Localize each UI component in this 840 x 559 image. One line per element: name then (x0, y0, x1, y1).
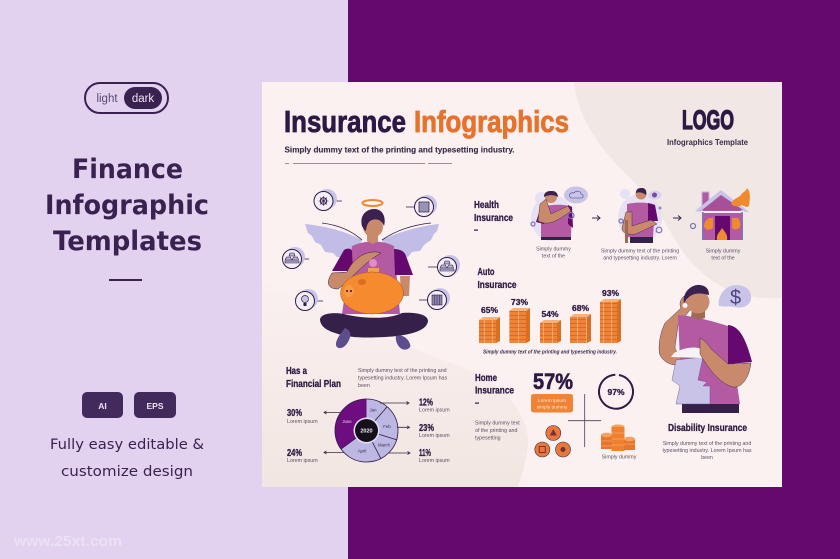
pie stat 23% (419, 423, 450, 439)
financial plan description: typesetting industry. Lorem Ipsum has (358, 376, 447, 382)
cross divider (568, 394, 601, 447)
watermark: www.25xt.com (13, 534, 122, 550)
left arm raised to head (659, 296, 690, 365)
health step 2 text: and typesetting industry. Lorem (603, 256, 677, 262)
pie stat 30% (287, 408, 318, 425)
pie stat 11% (419, 448, 450, 464)
orange callout: Lorem Ipsum (538, 398, 566, 404)
left panel heading (45, 154, 209, 257)
infographic card (262, 82, 782, 487)
health step 1 text: text of the (542, 254, 565, 260)
section: home insurance: of the printing and (475, 428, 517, 434)
pie stat 12%: 12% (419, 398, 433, 408)
sleeve (728, 325, 752, 364)
section: health insurance heading (474, 199, 513, 231)
section: financial plan heading: Financial Plan (286, 378, 341, 390)
shirt (342, 242, 400, 314)
bar 68% (570, 303, 591, 343)
icon: gear (314, 189, 337, 210)
health step 2 text: Simply dummy text of the printing (601, 248, 679, 254)
icon: safe (414, 195, 437, 216)
pie arrows (324, 402, 410, 454)
subtitle: Simply dummy text of the printing and typesetting industry. (284, 144, 514, 154)
financial plan description: Simply dummy text of the printing and (358, 368, 447, 374)
pie stat 24%: Lorem ipsum (287, 458, 318, 464)
section: financial plan heading (286, 365, 341, 390)
card background blob top right (574, 82, 782, 298)
section: disability insurance: been (701, 455, 713, 461)
pie chart: June (342, 419, 352, 424)
bar 93% (600, 288, 621, 343)
falling coin (369, 259, 377, 267)
slice: June (335, 399, 366, 449)
icon: calculator (428, 288, 450, 310)
piggy bank (340, 272, 404, 314)
section: disability insurance: Simply dummy text of the printing and (663, 441, 751, 447)
section: financial plan heading: Has a (286, 365, 307, 377)
pie stat 23%: 23% (419, 423, 434, 434)
shirt (678, 315, 740, 404)
financial plan description (358, 368, 447, 389)
title: Insurance (284, 104, 406, 139)
stat 57%: 57% (533, 369, 573, 394)
left panel heading: Infographic (45, 190, 209, 221)
neck and head (367, 228, 378, 244)
house text: Simply dummy (706, 248, 741, 254)
pie chart: March (378, 442, 391, 448)
icon: light bulb (296, 289, 318, 310)
ring stat 97%: 97% (607, 387, 625, 397)
section: health insurance heading: Insurance (474, 212, 513, 224)
health step 1 text: Simply dummy (536, 246, 571, 252)
left foot (336, 328, 350, 348)
right foot (396, 335, 410, 350)
icon: gold bars right (438, 255, 460, 276)
file format badges: EPS (146, 401, 164, 411)
section: disability insurance (662, 422, 752, 461)
left wing (305, 224, 362, 257)
pie stat 30%: Lorem ipsum (287, 419, 318, 425)
section: disability insurance: Disability Insurance (668, 422, 747, 434)
ring stat 97% (596, 372, 636, 411)
file format badges (82, 392, 176, 418)
pie chart: Jan (370, 408, 377, 412)
orange callout (531, 394, 573, 412)
logo: Infographics Template (667, 138, 749, 147)
crossed legs (320, 313, 428, 338)
left panel heading: Finance (72, 154, 183, 185)
pie center 2020: 2020 (360, 428, 373, 434)
bar 54%: 54% (541, 309, 559, 319)
right wing (382, 224, 439, 257)
section: disability insurance: typesetting industry. Lorem Ipsum has (662, 448, 752, 454)
section: home insurance: Insurance (475, 384, 514, 396)
sleeves (332, 249, 413, 275)
mode toggle: light (96, 93, 118, 105)
pie chart: Feb (383, 424, 391, 429)
bar 54% (540, 309, 561, 343)
mode toggle: dark (132, 93, 154, 105)
logo: LOGO (682, 105, 734, 135)
section: health insurance heading: Health (474, 199, 499, 211)
mode toggle (85, 83, 168, 113)
card background blob bottom left (262, 280, 528, 487)
section: home insurance: Simply dummy text (475, 420, 520, 426)
section: auto insurance heading: Auto (478, 266, 494, 278)
arrow step 1 to 2 (592, 216, 600, 220)
pie stat 11%: Lorem ipsum (419, 458, 450, 464)
section: auto insurance heading (478, 266, 517, 291)
health step 2 figure (618, 188, 662, 243)
bar 65%: 65% (481, 305, 498, 315)
large figure reading bill (659, 285, 752, 413)
section: auto insurance heading: Insurance (478, 279, 517, 291)
pie stat 23%: Lorem ipsum (419, 433, 450, 439)
speech bubble with dollar: $ (730, 287, 741, 309)
section: home insurance: Home (475, 372, 497, 384)
left panel feature text (50, 437, 204, 480)
section: home insurance (475, 372, 520, 442)
house text: text of the (711, 256, 735, 262)
health step 1 text (536, 246, 571, 260)
bar 93%: 93% (602, 288, 619, 298)
icon connectors (301, 201, 438, 301)
pie stat 12%: Lorem ipsum (419, 408, 450, 414)
financial plan description: been (358, 383, 370, 389)
health step 1 figure (531, 186, 588, 241)
neck and head (691, 310, 705, 320)
left lilac panel background (0, 0, 348, 559)
pie stat 30%: 30% (287, 408, 302, 419)
pie stat 11%: 11% (419, 448, 431, 459)
bar 68%: 68% (572, 303, 589, 313)
house text (706, 248, 741, 262)
heading rule (109, 279, 142, 281)
section: home insurance: typesetting (475, 436, 501, 442)
bar 73%: 73% (511, 297, 528, 307)
left panel heading: Templates (53, 226, 202, 257)
bar 65% (479, 305, 500, 343)
arm reaching to coin slot (328, 252, 381, 289)
pie stat 24% (287, 448, 318, 464)
coin caption: Simply dummy (602, 454, 637, 460)
right purple panel background (348, 0, 840, 559)
health step 2 text (601, 248, 679, 262)
halo (362, 200, 382, 206)
orange callout: simply dummy (537, 404, 568, 410)
pie stat 12% (419, 398, 450, 414)
bar 73% (509, 297, 530, 343)
bar chart: auto insurance stacks (479, 288, 621, 343)
left panel feature text: Fully easy editable & (50, 437, 204, 453)
coin stacks (601, 424, 635, 451)
burning house (690, 188, 750, 240)
paper bill (672, 357, 710, 404)
icon: gold bars left (282, 247, 305, 268)
pants (682, 404, 739, 413)
right forearm (700, 338, 751, 387)
orange home icons (535, 426, 570, 457)
pie chart (334, 398, 398, 462)
pie stat 24%: 24% (287, 448, 302, 459)
right arm (400, 276, 410, 296)
title: Infographics (414, 104, 569, 139)
angel figure with piggy bank (282, 189, 460, 350)
arrow step 2 to 3 (673, 216, 681, 220)
title (284, 104, 569, 139)
file format badges: AI (98, 401, 107, 411)
pie chart: April (358, 448, 366, 454)
bar chart caption: Simply dummy text of the printing and typesetting industry. (483, 350, 617, 356)
logo (667, 105, 749, 147)
left panel feature text: customize design (61, 464, 193, 480)
